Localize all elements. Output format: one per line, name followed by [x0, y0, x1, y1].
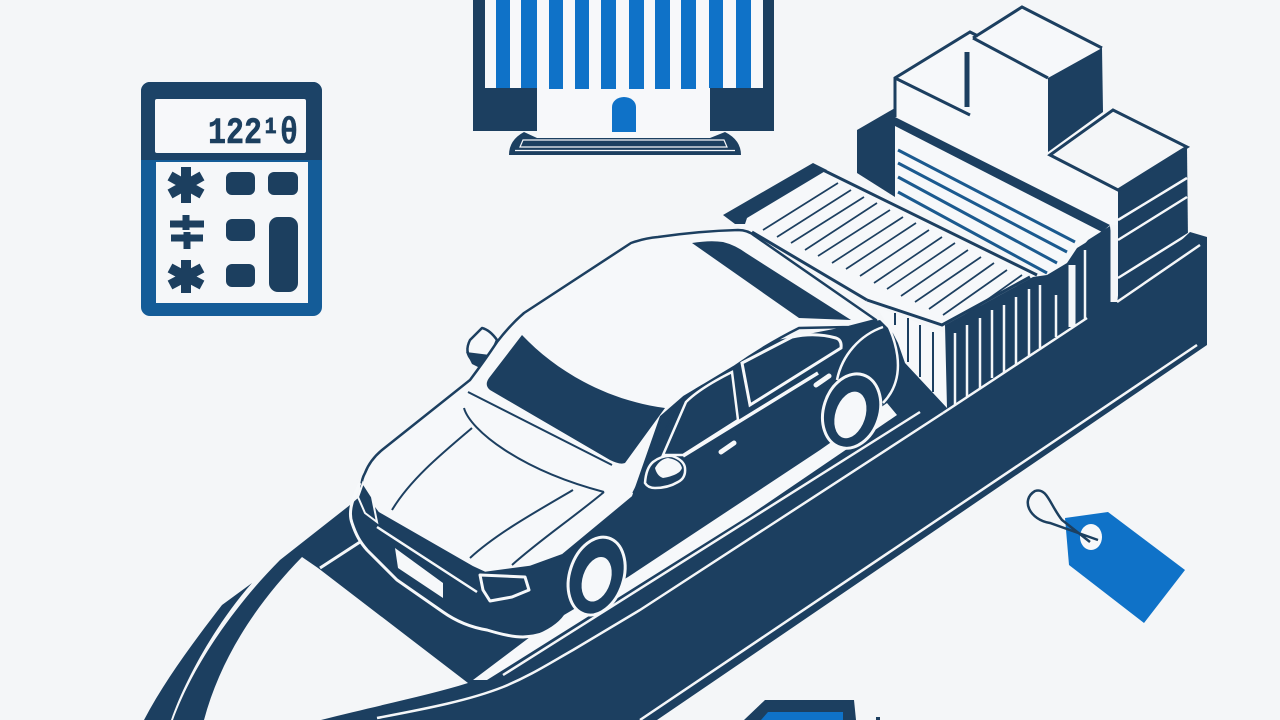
container front dark face [945, 240, 1090, 408]
tag string [1028, 490, 1098, 542]
warehouse main light body [895, 7, 1118, 303]
container side dark ribs [895, 313, 933, 392]
warehouse blocks [857, 7, 1190, 303]
warehouse outlines [895, 7, 1187, 190]
car body lines [392, 392, 612, 565]
white running board strip [473, 403, 897, 680]
icon: calculator [141, 82, 322, 316]
container roof [723, 163, 1037, 325]
warehouse blue slats [898, 150, 1075, 273]
car left headlight [358, 483, 377, 522]
container roof dark corner [723, 163, 827, 224]
car door handles [721, 376, 829, 452]
car side front window [663, 372, 738, 455]
car bumper outline [350, 483, 557, 637]
building base [509, 132, 741, 155]
icon: bank building [473, 0, 774, 155]
partial icon at bottom edge [744, 700, 880, 720]
car front wheel [559, 530, 635, 622]
car side rear window [742, 335, 841, 405]
car rear wheel [813, 366, 890, 456]
container roof slats [763, 183, 1022, 322]
car grille highlight [377, 527, 477, 592]
car right headlight [480, 575, 529, 601]
car windshield [487, 335, 665, 464]
warehouse dark faces [1048, 48, 1103, 152]
car pillar line [633, 385, 703, 493]
building door [612, 97, 636, 132]
car rear window [692, 241, 851, 320]
car license plate [395, 548, 443, 598]
car rear fender lines [837, 310, 898, 403]
calculator display number: 122¹θ [208, 113, 298, 155]
car body top surface [361, 230, 876, 573]
container roof edges [752, 170, 1037, 325]
car [350, 230, 898, 637]
dark platform [173, 226, 1207, 720]
container front white ribs [955, 250, 1085, 405]
car window sill [683, 373, 818, 456]
shipping container [723, 163, 1090, 413]
curved road outer edge [144, 583, 252, 720]
calculator keys [226, 172, 298, 292]
warehouse right side stripes [1118, 178, 1190, 278]
building columns [496, 0, 751, 89]
platform highlight lines [320, 225, 1200, 720]
car left mirror [467, 328, 497, 367]
calculator symbols [170, 167, 204, 293]
car front grille [380, 515, 477, 587]
icon: price tag [1028, 490, 1185, 623]
container base highlight [943, 318, 1087, 413]
warehouse left dark side [857, 108, 895, 197]
car side mirror [645, 456, 685, 488]
container side light face [880, 308, 947, 408]
